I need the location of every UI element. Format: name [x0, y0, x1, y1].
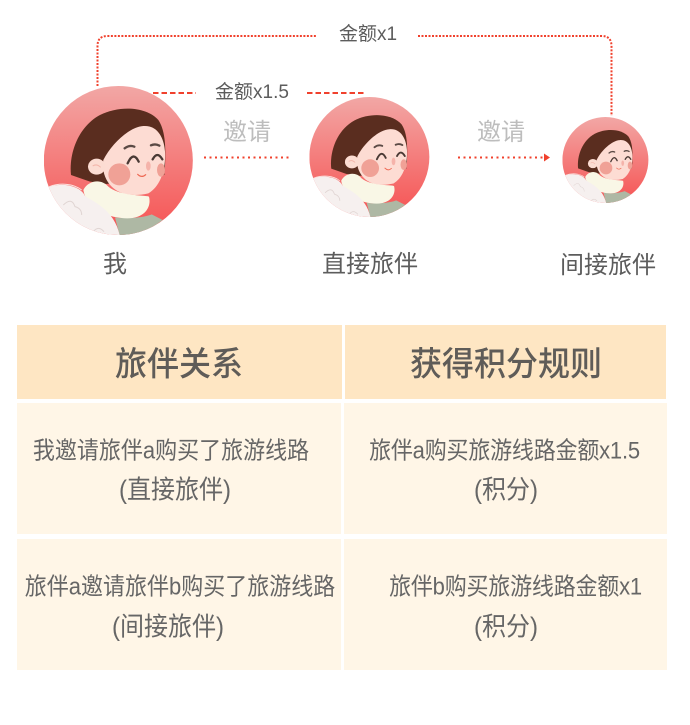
heading: relationship: 旅伴关系 [115, 345, 243, 383]
icon: avatar indirect partner [562, 117, 648, 203]
icon: avatar direct partner [310, 97, 430, 217]
text: row 1 relationship: 我邀请旅伴a购买了旅游线路 [33, 437, 309, 464]
label: indirect partner: 间接旅伴 [560, 252, 656, 279]
connector lines [96, 35, 612, 162]
table cell: row 2 rule [344, 539, 667, 670]
text: row 1 relationship note: (直接旅伴) [119, 476, 231, 505]
label: amount x1.5: 金额x1.5 [215, 82, 289, 103]
connector: invite direct [204, 156, 289, 158]
text: row 1 rule note: (积分) [474, 476, 538, 505]
heading: points rule: 获得积分规则 [410, 345, 602, 383]
table cell: row 1 rule [344, 403, 667, 534]
text: row 2 rule: 旅伴b购买旅游线路金额x1 [389, 573, 642, 600]
label: amount x1: 金额x1 [339, 24, 397, 45]
label: invite indirect: 邀请 [477, 119, 525, 146]
connector: amount x1.5 left [153, 92, 196, 94]
connector: amount x1 right [418, 36, 612, 116]
connector: amount x1.5 right [307, 92, 365, 94]
table cell: row 1 relationship [17, 403, 341, 534]
icon: avatar me [44, 86, 193, 235]
label: invite direct: 邀请 [223, 119, 271, 146]
table header: points rule [345, 325, 666, 399]
table cell: row 2 relationship [17, 539, 341, 670]
text: row 2 relationship note: (间接旅伴) [112, 613, 224, 642]
label: me: 我 [103, 251, 127, 278]
table header: relationship [17, 325, 342, 399]
text: row 2 rule note: (积分) [474, 613, 538, 642]
text: row 1 rule: 旅伴a购买旅游线路金额x1.5 [369, 437, 640, 464]
label: direct partner: 直接旅伴 [322, 251, 418, 278]
connector: amount x1 left [98, 36, 316, 86]
text: row 2 relationship: 旅伴a邀请旅伴b购买了旅游线路 [25, 573, 335, 600]
arrow: invite indirect [458, 154, 550, 162]
